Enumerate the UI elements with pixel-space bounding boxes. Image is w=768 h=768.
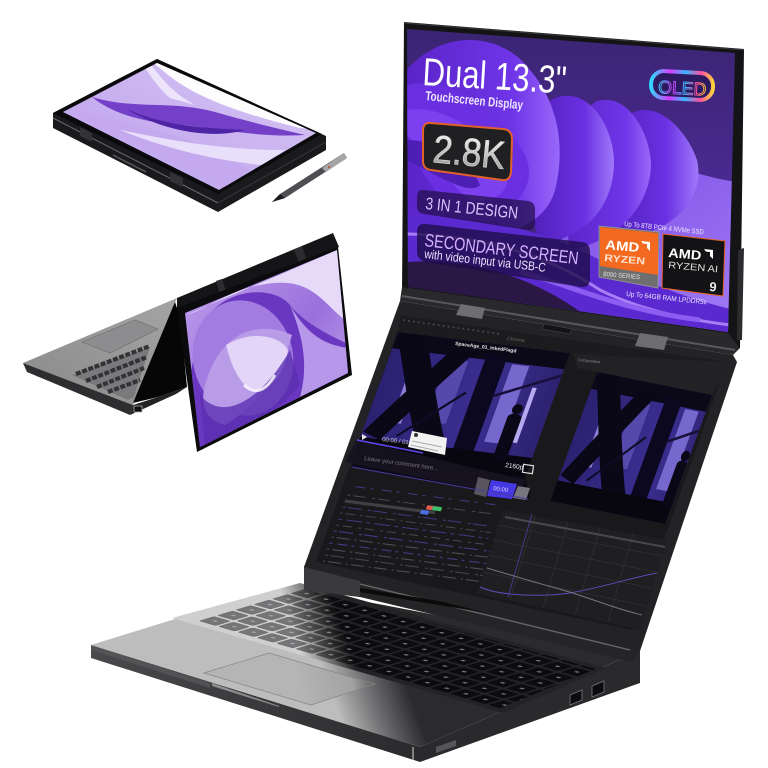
- storage note: Up To 8TB PCIe 4 NVMe SSD: [624, 221, 704, 236]
- tent touchpad: [82, 320, 158, 353]
- AMD Ryzen 8000 badge: [599, 226, 659, 288]
- 3 in 1 design pill: 3 IN 1 DESIGN: [425, 194, 519, 223]
- tent screen frame: [177, 247, 352, 452]
- base top surface: [91, 590, 635, 747]
- left video player: 00:00 / 01:00: [382, 437, 418, 447]
- lilac band: [63, 112, 250, 188]
- petal 4: [620, 110, 698, 231]
- send buttons: [474, 477, 490, 497]
- base bottom edge: [91, 645, 640, 762]
- laptop: tablet mode: [50, 55, 330, 212]
- right video frame: [550, 372, 712, 524]
- speaker grille: [436, 740, 456, 753]
- AMD Ryzen 8000 badge: AMD: [605, 237, 640, 255]
- tent port: [134, 406, 142, 412]
- top screen: [400, 22, 744, 355]
- tent keyboard deck: [23, 298, 177, 405]
- AMD Ryzen 8000 badge: RYZEN: [604, 253, 646, 268]
- player footer: [352, 457, 530, 499]
- front thumb notch: [212, 683, 279, 707]
- tablet screen wallpaper: [63, 63, 316, 190]
- tablet body: [53, 59, 326, 212]
- memory note: Up To 64GB RAM LPDDR5x: [626, 291, 708, 307]
- touchpad: [204, 653, 375, 705]
- petal 1 big: [407, 40, 560, 240]
- right floor swoosh: [518, 174, 732, 332]
- wallpaper: [400, 25, 740, 335]
- left video player: [345, 332, 570, 500]
- secondary screen pill: [417, 224, 590, 287]
- controls: [362, 434, 367, 440]
- petal 3: [566, 100, 651, 250]
- AMD Ryzen AI 9 badge: [662, 234, 725, 296]
- player title: SpaceAge_01_InkedFlagd: [455, 341, 517, 355]
- 2.8K badge: 2.8K: [431, 128, 507, 178]
- lower hinge bar: [304, 566, 640, 662]
- layer list rows: [323, 486, 521, 583]
- dark swoosh: [92, 97, 305, 136]
- central hinge: [400, 287, 740, 355]
- right video preview: Composition: [578, 357, 601, 364]
- right video preview: [550, 356, 725, 524]
- timeline panel: [323, 486, 521, 583]
- comment input: Leave your comment here...: [364, 456, 439, 472]
- AMD Ryzen AI 9 badge: RYZEN AI: [668, 260, 719, 275]
- app header: [398, 316, 727, 380]
- petal 2: [529, 96, 614, 245]
- top screen frame: [402, 22, 744, 348]
- right panel header: [574, 354, 727, 395]
- laptop: tent mode: [23, 233, 355, 455]
- AMD Ryzen AI 9 badge: AMD: [668, 245, 702, 263]
- AMD Ryzen 8000 badge: 8000 SERIES: [603, 271, 641, 281]
- OLED badge: OLED: [658, 77, 707, 100]
- main laptop: [91, 301, 759, 762]
- graph editor: [477, 510, 667, 630]
- OLED badge: [650, 70, 714, 101]
- secondary screen pill: with video input via USB-C: [423, 247, 546, 275]
- tent hinge bar: [177, 233, 339, 309]
- subheading: Touchscreen Display: Touchscreen Display: [425, 88, 524, 112]
- tent keyboard: [72, 347, 150, 400]
- keyboard keys: [196, 588, 596, 709]
- keyboard keys lit left side: [200, 590, 351, 664]
- app header: Chrome: [507, 336, 525, 344]
- tent screen wallpaper: [185, 250, 348, 447]
- left video player: 00:00: [493, 486, 509, 494]
- heading: Dual 13.3": Dual 13.3": [421, 51, 568, 103]
- tent black wedge: [133, 302, 187, 403]
- hinge block right: [635, 333, 668, 350]
- 3 in 1 design pill: [417, 190, 535, 230]
- progress bar: [357, 440, 423, 453]
- left video frame: [360, 332, 570, 478]
- lower screen bezel: [304, 301, 737, 651]
- colour swatches: [426, 505, 433, 510]
- tablet hinges: [80, 127, 92, 142]
- resolution label: 2160p: [505, 462, 524, 472]
- usb ports: [570, 681, 604, 705]
- secondary screen pill: SECONDARY SCREEN: [424, 230, 580, 268]
- comment popup: [408, 431, 447, 455]
- hinge block left: [456, 304, 485, 319]
- base corner highlight: [412, 747, 414, 760]
- white sheen: [155, 63, 306, 128]
- bottom sweeps: [407, 215, 735, 335]
- camera pill: [542, 324, 572, 334]
- AMD Ryzen AI 9 badge: 9: [709, 279, 717, 295]
- keyboard well: [172, 583, 606, 713]
- graph curves: [480, 573, 657, 595]
- stylus pen: [272, 153, 347, 202]
